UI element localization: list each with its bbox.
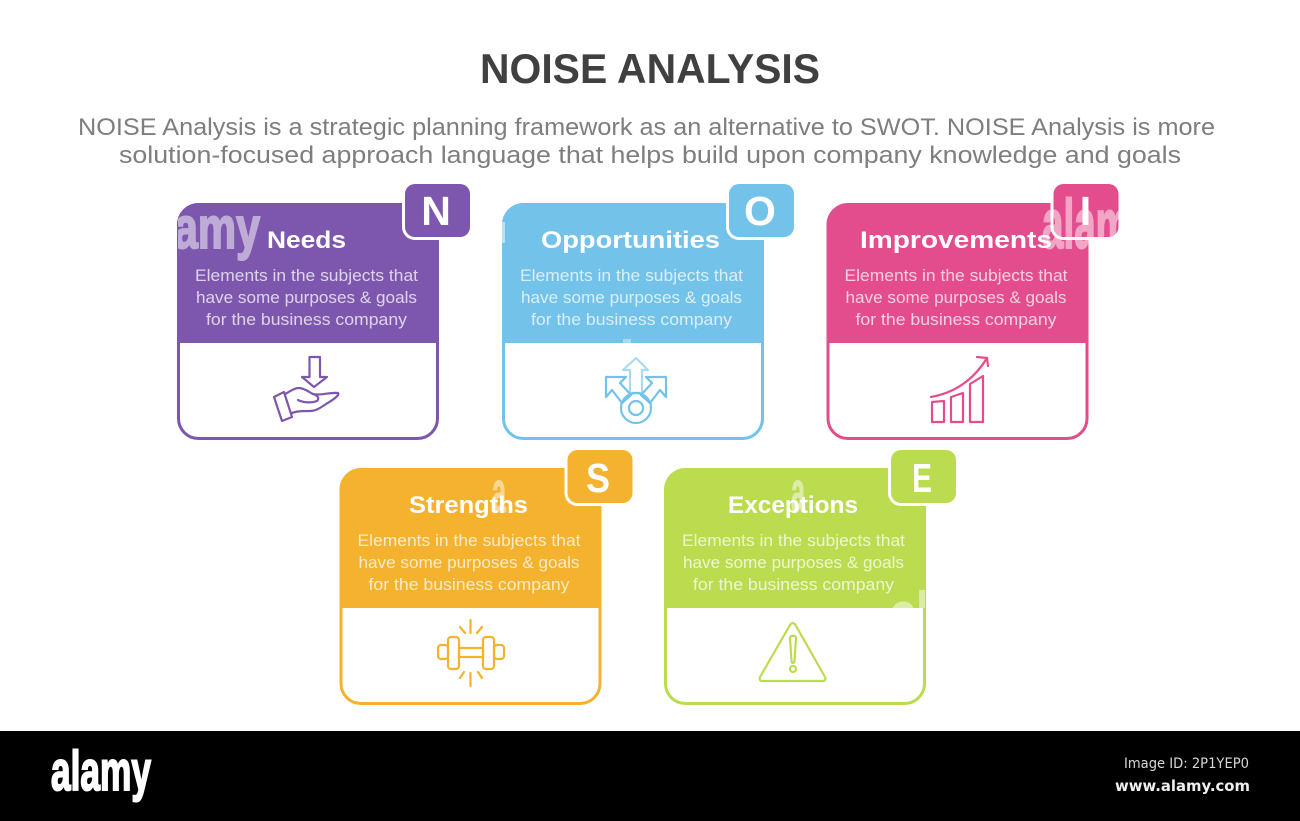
panel: exceptions: Elements in the subjects that xyxy=(682,531,905,550)
watermark: alamy over needs panel: amy xyxy=(174,196,260,261)
panel: exceptions: Exceptions xyxy=(728,492,858,519)
panel: improvements: Elements in the subjects that xyxy=(844,266,1068,285)
panel: opportunities: Opportunities xyxy=(541,227,720,254)
panel: opportunities xyxy=(502,182,796,438)
icon: branching arrows xyxy=(606,358,666,423)
panel: opportunities: Elements in the subjects that xyxy=(520,266,743,285)
panel: needs xyxy=(177,182,472,438)
panel: strengths: Elements in the subjects that xyxy=(358,531,581,550)
watermark: alamy fragment: al xyxy=(890,581,930,648)
footer bar xyxy=(0,731,1300,821)
panel: exceptions: have some purposes & goals xyxy=(683,553,904,572)
panel: strengths: have some purposes & goals xyxy=(358,553,580,572)
panel: strengths xyxy=(340,448,634,704)
panel: strengths: S xyxy=(586,455,610,501)
panel: strengths: for the business company xyxy=(368,575,570,594)
website: www.alamy.com xyxy=(1115,777,1250,795)
panel: opportunities: for the business company xyxy=(531,310,733,329)
panel: improvements: Improvements xyxy=(860,227,1052,254)
title: NOISE ANALYSIS xyxy=(480,45,820,92)
panel: exceptions: for the business company xyxy=(693,575,895,594)
panel: opportunities: have some purposes & goals xyxy=(521,288,742,307)
intro text xyxy=(78,114,1215,169)
panel: improvements: have some purposes & goals xyxy=(846,288,1066,307)
footer logo: alamy xyxy=(51,739,151,802)
icon: rising bar chart xyxy=(931,357,988,422)
panel: improvements: for the business company xyxy=(856,310,1057,329)
image id: Image ID: 2P1YEP0 xyxy=(1124,756,1249,772)
intro text: solution-focused approach language that helps build upon company knowledge and goals xyxy=(119,142,1181,169)
panel: opportunities: O xyxy=(744,188,776,234)
panel: exceptions xyxy=(664,448,958,704)
watermark: alamy fragment: alam xyxy=(1042,185,1130,263)
panel: strengths: Strengths xyxy=(409,492,528,519)
panel: improvements xyxy=(826,182,1130,438)
panel: needs: Elements in the subjects that xyxy=(195,266,418,285)
panel: needs: Needs xyxy=(267,227,346,254)
intro text: NOISE Analysis is a strategic planning framework as an alternative to SWOT. NOISE Analysis is more xyxy=(78,114,1215,141)
panel: needs: for the business company xyxy=(206,310,408,329)
panel: strengths: a xyxy=(492,460,506,525)
panel: improvements: I xyxy=(1080,188,1091,234)
panel: exceptions: E xyxy=(912,455,932,501)
icon: dumbbell xyxy=(438,620,504,686)
icon: warning triangle xyxy=(760,623,825,681)
icon: hand receiving arrow xyxy=(274,357,338,421)
panel: needs: N xyxy=(421,188,451,234)
panel: needs: have some purposes & goals xyxy=(196,288,417,307)
watermark: alamy fragment xyxy=(792,480,925,608)
watermark: alamy fragment: a xyxy=(791,460,805,525)
